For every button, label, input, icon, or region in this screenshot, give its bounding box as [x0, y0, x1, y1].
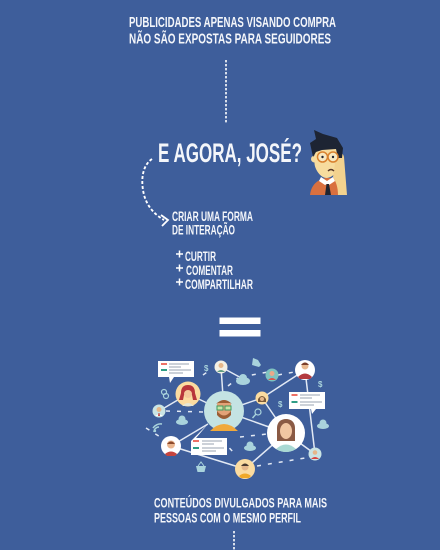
text block: conclusion: CONTEÚDOS DIVULGADOS PARA MAIS [154, 494, 327, 510]
text block: conclusion: PESSOAS COM O MESMO PERFIL [154, 510, 301, 526]
avatar: yellow man bottom [235, 459, 255, 479]
icon: small symbols: $ [204, 364, 209, 373]
icon: clouds [176, 358, 329, 451]
dotted connector: bottom [233, 531, 235, 550]
text block: create interaction: DE INTERAÇÃO [172, 222, 235, 238]
icon: equals sign [220, 318, 260, 336]
arrow: dashed curve to text [142, 159, 168, 226]
avatar: woman, large white circle [267, 414, 305, 452]
list: actions: CURTIR [185, 249, 216, 264]
avatar: man in white circle top right [295, 360, 315, 380]
dotted connector: top [225, 60, 227, 124]
text block: create interaction: CRIAR UMA FORMA [172, 209, 253, 224]
icon: small symbols: $ [278, 400, 283, 409]
text block: conclusion [154, 494, 327, 526]
network diagram [146, 358, 329, 479]
list: actions [176, 249, 253, 292]
avatar: small left [152, 404, 166, 418]
avatar: small top [214, 360, 228, 374]
icon: worried man with glasses [310, 130, 347, 195]
heading: top statement: NÃO SÃO EXPOSTAS PARA SEGUIDORES [129, 30, 331, 48]
speech bubble: upper left [158, 361, 194, 383]
avatar: red hair woman [176, 382, 200, 406]
heading: top statement [129, 14, 336, 48]
avatar: teal small [266, 368, 278, 382]
icon: small symbols [153, 364, 323, 472]
text block: create interaction [172, 209, 253, 238]
avatar: small bottom right [308, 448, 322, 460]
avatar: yellow small [256, 392, 268, 404]
icon: small symbols: $ [318, 380, 323, 389]
list: actions: COMENTAR [186, 263, 233, 278]
avatar: man in white circle left [161, 436, 181, 456]
speech bubble: right [289, 392, 325, 414]
speech bubble: lower [191, 424, 227, 455]
list: actions: COMPARTILHAR [185, 277, 253, 292]
title: E agora, José?: E AGORA, JOSÉ? [158, 137, 302, 168]
avatar: bearded man, large [204, 391, 244, 431]
